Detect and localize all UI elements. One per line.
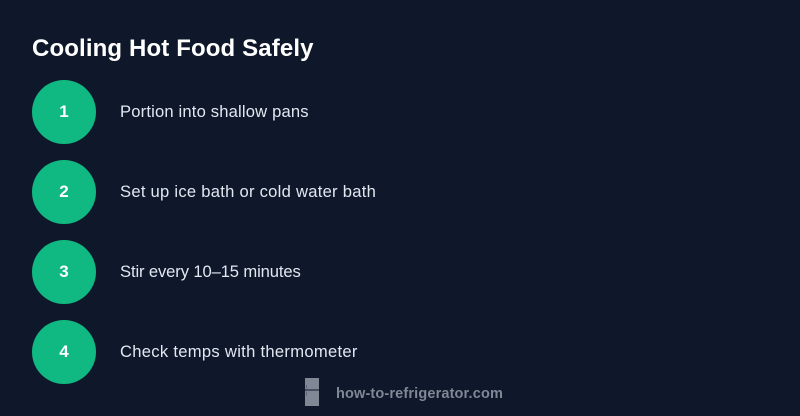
step 3: Stir every 10–15 minutes — [120, 262, 301, 281]
step 2: Set up ice bath or cold water bath — [120, 182, 376, 201]
step 4: 4 — [59, 342, 69, 361]
icon: refrigerator — [305, 378, 319, 406]
title: Cooling Hot Food Safely — [32, 35, 314, 62]
step 4: Check temps with thermometer — [120, 342, 358, 361]
step 2 — [32, 160, 376, 224]
step 1: Portion into shallow pans — [120, 102, 309, 121]
step 2: 2 — [59, 182, 69, 201]
step 1: 1 — [59, 102, 69, 121]
step 1 — [32, 80, 309, 144]
brand text: how-to-refrigerator.com — [336, 386, 503, 402]
step 3 — [32, 240, 301, 304]
step 3: 3 — [59, 262, 69, 281]
step 4 — [32, 320, 358, 384]
